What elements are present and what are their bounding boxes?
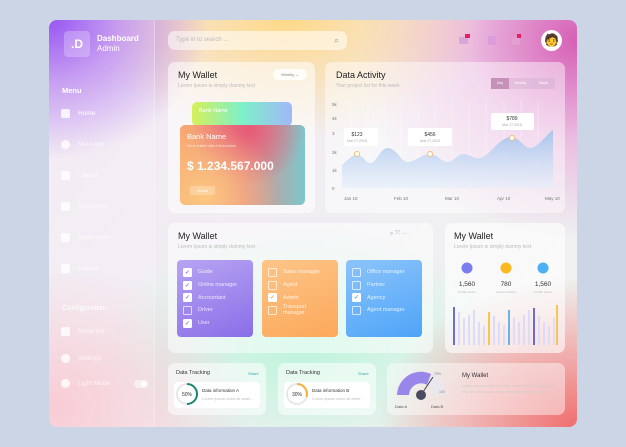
brand text <box>97 34 139 53</box>
menu items: Layout <box>78 172 98 179</box>
area chart: May 10 <box>545 196 560 201</box>
panel: stats bars: My Wallet <box>454 231 493 241</box>
area chart: $789 <box>506 116 518 122</box>
card: purple: ✓ <box>185 270 190 276</box>
panel: data tracking A <box>168 363 266 415</box>
card: orange: Transport <box>283 304 306 310</box>
card: purple: Driver <box>198 307 213 313</box>
config items: Light Mode <box>78 380 110 387</box>
card: blue: Partner <box>367 282 385 288</box>
menu items: Home <box>78 110 95 117</box>
panel: data tracking A: Data information A <box>202 388 239 393</box>
panel: gauge: Lorem ipsum dolor sit amet, consectetuer adipiscing elit, sed diam nonummy nibh euismod tincidunt. <box>462 383 554 394</box>
panel: data tracking B: Data Tracking <box>286 370 320 376</box>
card: blue: ✓ <box>354 295 359 301</box>
panel: data activity: Data Activity <box>336 70 386 80</box>
back card <box>192 102 292 126</box>
panel: gauge: 75% <box>434 372 441 376</box>
front card: Bank Name <box>187 132 226 141</box>
search bar: Type in to search ... <box>176 37 228 43</box>
area chart <box>332 100 560 201</box>
area chart: 5k <box>332 102 338 107</box>
card: blue: Agency <box>367 295 385 301</box>
tabs <box>491 78 555 89</box>
card: purple: ✓ <box>185 321 190 327</box>
area chart: Jan 10 <box>344 196 358 201</box>
card: purple: User <box>198 320 210 326</box>
brand text: Dashboard <box>97 34 139 43</box>
panel: data tracking A: Share <box>248 371 259 376</box>
panel: data tracking A: Lorem ipsum dolor sit amet .. <box>202 396 254 401</box>
area chart: Feb 10 <box>394 196 409 201</box>
panel: my wallet cards: My Wallet <box>178 70 217 80</box>
panel: my wallet checklists: ⌕ ⤧ ··· <box>390 231 408 237</box>
menu items: Document <box>78 203 108 210</box>
card: purple <box>177 260 253 337</box>
logo: .D <box>71 37 83 51</box>
card: blue: Office manager <box>367 269 405 275</box>
area chart: Mar 27,2018 <box>347 139 367 143</box>
panel: data tracking A: 50% <box>182 392 193 398</box>
panel: gauge: Data A <box>395 404 407 409</box>
config items: Stock list <box>78 328 104 335</box>
card: orange <box>262 260 338 337</box>
panel: my wallet checklists: My Wallet <box>178 231 217 241</box>
panel: stats bars <box>445 223 565 353</box>
area chart: 3 <box>332 131 335 136</box>
panel: stats bars: Profile Views <box>458 290 476 294</box>
card: purple: Guide <box>198 269 213 275</box>
area chart: 4k <box>332 116 338 121</box>
card: purple: ✓ <box>185 283 190 289</box>
front card <box>180 125 305 205</box>
panel: data tracking A: Data Tracking <box>176 370 210 376</box>
panel: my wallet checklists <box>168 223 433 353</box>
panel: stats bars: 780 <box>501 281 512 288</box>
tabs: Month <box>539 81 548 85</box>
area chart: Mar 10 <box>445 196 460 201</box>
panel: my wallet cards <box>168 62 315 213</box>
card: orange: Admin <box>283 295 299 301</box>
config items: Settings <box>78 355 102 362</box>
area chart: Mar 27,2018 <box>420 139 440 143</box>
card: orange: ✓ <box>270 295 275 301</box>
panel: stats bars: Lorem Ipsum is simply dummy text <box>454 244 531 250</box>
area chart: 0 <box>332 186 335 191</box>
panel: gauge: Data B <box>431 404 444 409</box>
menu heading: Menu <box>62 86 82 95</box>
card: orange: manager <box>283 310 305 316</box>
brand text: Admin <box>97 44 120 53</box>
menu items: Message <box>78 141 104 148</box>
back card: Bank Name <box>199 108 228 114</box>
avatar: 🧑 <box>544 33 559 47</box>
front card: Your wallet data information <box>187 143 236 148</box>
area chart: 1k <box>332 168 338 173</box>
card: blue <box>346 260 422 337</box>
panel: data tracking B: Share <box>358 371 369 376</box>
panel: data tracking B <box>278 363 376 415</box>
config items <box>61 327 148 388</box>
area chart: $456 <box>424 132 436 138</box>
panel: stats bars: 1,560 <box>459 281 476 288</box>
panel: my wallet cards: Weekly ⌄ <box>281 72 299 77</box>
sidebar <box>49 20 155 427</box>
menu items: Application <box>78 234 110 241</box>
area chart: 2k <box>332 150 338 155</box>
search bar: ⌕ <box>334 35 339 45</box>
card: purple: Accountant <box>198 295 226 301</box>
card: orange: Agent <box>283 282 297 288</box>
panel: gauge: My Wallet <box>462 373 488 379</box>
panel: my wallet cards: Lorem Ipsum is simply dummy text <box>178 83 255 89</box>
panel: data activity: Your project list for this week <box>336 83 399 89</box>
avatar <box>541 30 562 51</box>
front card: $ 1.234.567.000 <box>187 159 274 173</box>
front card: Detail <box>197 188 208 193</box>
card: purple: Online manager <box>198 282 237 288</box>
tabs: Weekly <box>515 81 526 85</box>
area chart: Apr 10 <box>497 196 511 201</box>
area chart: $123 <box>351 132 363 138</box>
top icons <box>459 30 562 51</box>
card: orange: Sales manager <box>283 269 320 275</box>
panel: data tracking B: 30% <box>292 392 303 398</box>
configuration heading: Configuration <box>62 303 107 312</box>
logo <box>64 31 90 57</box>
panel: data tracking B: Data information B <box>312 388 349 393</box>
dashboard frame <box>49 20 577 427</box>
panel: gauge: 100 <box>439 390 445 394</box>
card: blue: Agent manager <box>367 307 405 313</box>
panel: gauge <box>387 363 565 415</box>
panel: stats bars: Unique Visitors <box>496 290 517 294</box>
menu items: Leadsit <box>78 265 99 272</box>
area chart: Mar 27,2018 <box>502 123 522 127</box>
tabs: Day <box>497 81 503 85</box>
panel: data activity <box>325 62 565 213</box>
menu items <box>61 109 110 273</box>
panel: data tracking B: Lorem ipsum dolor sit amet .. <box>312 396 364 401</box>
card: purple: ✓ <box>185 295 190 301</box>
search bar <box>168 31 347 50</box>
panel: stats bars: 1,560 <box>535 281 552 288</box>
panel: stats bars: Profile Views <box>534 290 552 294</box>
panel: my wallet checklists: Lorem Ipsum is simply dummy text <box>178 244 255 250</box>
